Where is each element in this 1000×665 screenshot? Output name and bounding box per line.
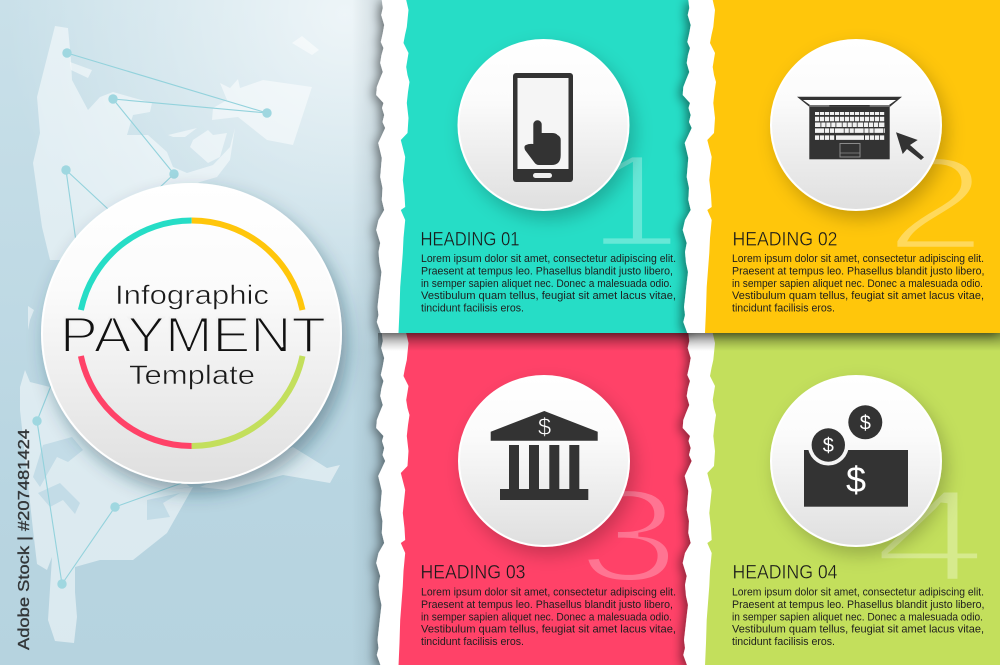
torn paper background 2 bbox=[683, 0, 1000, 333]
big number 3: 3 bbox=[578, 462, 679, 609]
central title badge bbox=[42, 184, 341, 483]
big number 2: 2 bbox=[885, 130, 986, 277]
body text 4: tincidunt facilisis eros. bbox=[732, 636, 835, 648]
body text 3: tincidunt facilisis eros. bbox=[421, 636, 524, 648]
body text 4: in semper sapien aliquet nec. Donec a malesuada odio. bbox=[732, 612, 983, 624]
panel 2: laptop bbox=[683, 0, 1000, 333]
torn paper background 4 bbox=[683, 333, 1000, 665]
panel 4: money bbox=[683, 333, 1000, 665]
body text 1: Vestibulum quam tellus, feugiat sit amet lacus vitae, bbox=[421, 290, 676, 302]
body text 3 bbox=[421, 586, 676, 648]
disc 1 bbox=[458, 40, 628, 210]
network lines bbox=[37, 53, 267, 584]
heading 3: HEADING 03 bbox=[420, 562, 526, 584]
body text 2 bbox=[732, 253, 984, 314]
map landmasses bbox=[20, 26, 340, 643]
body text 3: Lorem ipsum dolor sit amet, consectetur adipiscing elit. bbox=[421, 586, 676, 598]
body text 4 bbox=[732, 586, 984, 648]
icon: coins and banknote: $ bbox=[860, 412, 871, 434]
body text 3: in semper sapien aliquet nec. Donec a malesuada odio. bbox=[421, 612, 672, 624]
big number 1: 1 bbox=[588, 128, 681, 275]
icon: laptop with cursor bbox=[797, 97, 924, 160]
ring: yellow arc bbox=[192, 220, 302, 310]
body text 2: Praesent at tempus leo. Phasellus blandit justo libero, bbox=[732, 266, 984, 278]
body text 1: tincidunt facilisis eros. bbox=[421, 302, 524, 314]
heading 4: HEADING 04 bbox=[732, 562, 838, 584]
badge disc bbox=[42, 184, 341, 483]
world map network bbox=[20, 26, 340, 643]
body text 4: Praesent at tempus leo. Phasellus blandit justo libero, bbox=[732, 599, 984, 611]
icon: coins and banknote: $ bbox=[846, 459, 866, 500]
body text 1: in semper sapien aliquet nec. Donec a malesuada odio. bbox=[421, 278, 672, 290]
disc 4 bbox=[771, 376, 941, 546]
body text 2: tincidunt facilisis eros. bbox=[732, 302, 835, 314]
icon: bank: $ bbox=[538, 414, 551, 441]
panel 3: bank bbox=[376, 333, 694, 665]
body text 4: Vestibulum quam tellus, feugiat sit amet lacus vitae, bbox=[732, 624, 984, 636]
background panel bbox=[0, 0, 400, 665]
network nodes bbox=[32, 48, 272, 589]
ring: teal arc bbox=[81, 220, 192, 310]
body text 2: Vestibulum quam tellus, feugiat sit amet lacus vitae, bbox=[732, 290, 984, 302]
disc 3 bbox=[459, 376, 629, 546]
body text 1: Lorem ipsum dolor sit amet, consectetur adipiscing elit. bbox=[421, 253, 676, 265]
body text 3: Praesent at tempus leo. Phasellus blandit justo libero, bbox=[421, 599, 673, 611]
heading 1: HEADING 01 bbox=[420, 228, 520, 250]
icon: coins and banknote bbox=[804, 405, 908, 507]
heading 2: HEADING 02 bbox=[732, 228, 838, 250]
icon: smartphone with hand bbox=[513, 73, 573, 182]
title: Infographic: Infographic bbox=[115, 280, 269, 310]
panel 1: mobile bbox=[376, 0, 694, 333]
disc 2 bbox=[771, 40, 941, 210]
torn paper background 3 bbox=[376, 333, 694, 665]
icon: coins and banknote: $ bbox=[823, 435, 834, 457]
body text 1 bbox=[421, 253, 676, 314]
stock id vertical label: Adobe Stock | #207481424 bbox=[16, 429, 33, 650]
body text 2: in semper sapien aliquet nec. Donec a malesuada odio. bbox=[732, 278, 983, 290]
big number 4: 4 bbox=[873, 462, 987, 609]
torn paper background 1 bbox=[376, 0, 694, 333]
ring: green arc bbox=[192, 356, 302, 446]
body text 1: Praesent at tempus leo. Phasellus blandit justo libero, bbox=[421, 266, 673, 278]
ring: pink arc bbox=[81, 356, 192, 446]
body text 2: Lorem ipsum dolor sit amet, consectetur adipiscing elit. bbox=[732, 253, 984, 265]
body text 3: Vestibulum quam tellus, feugiat sit amet lacus vitae, bbox=[421, 624, 676, 636]
title: Template: Template bbox=[129, 360, 255, 390]
icon: bank bbox=[491, 411, 598, 500]
map bays bbox=[33, 437, 180, 520]
body text 4: Lorem ipsum dolor sit amet, consectetur adipiscing elit. bbox=[732, 586, 984, 598]
title: PAYMENT: PAYMENT bbox=[60, 307, 326, 363]
